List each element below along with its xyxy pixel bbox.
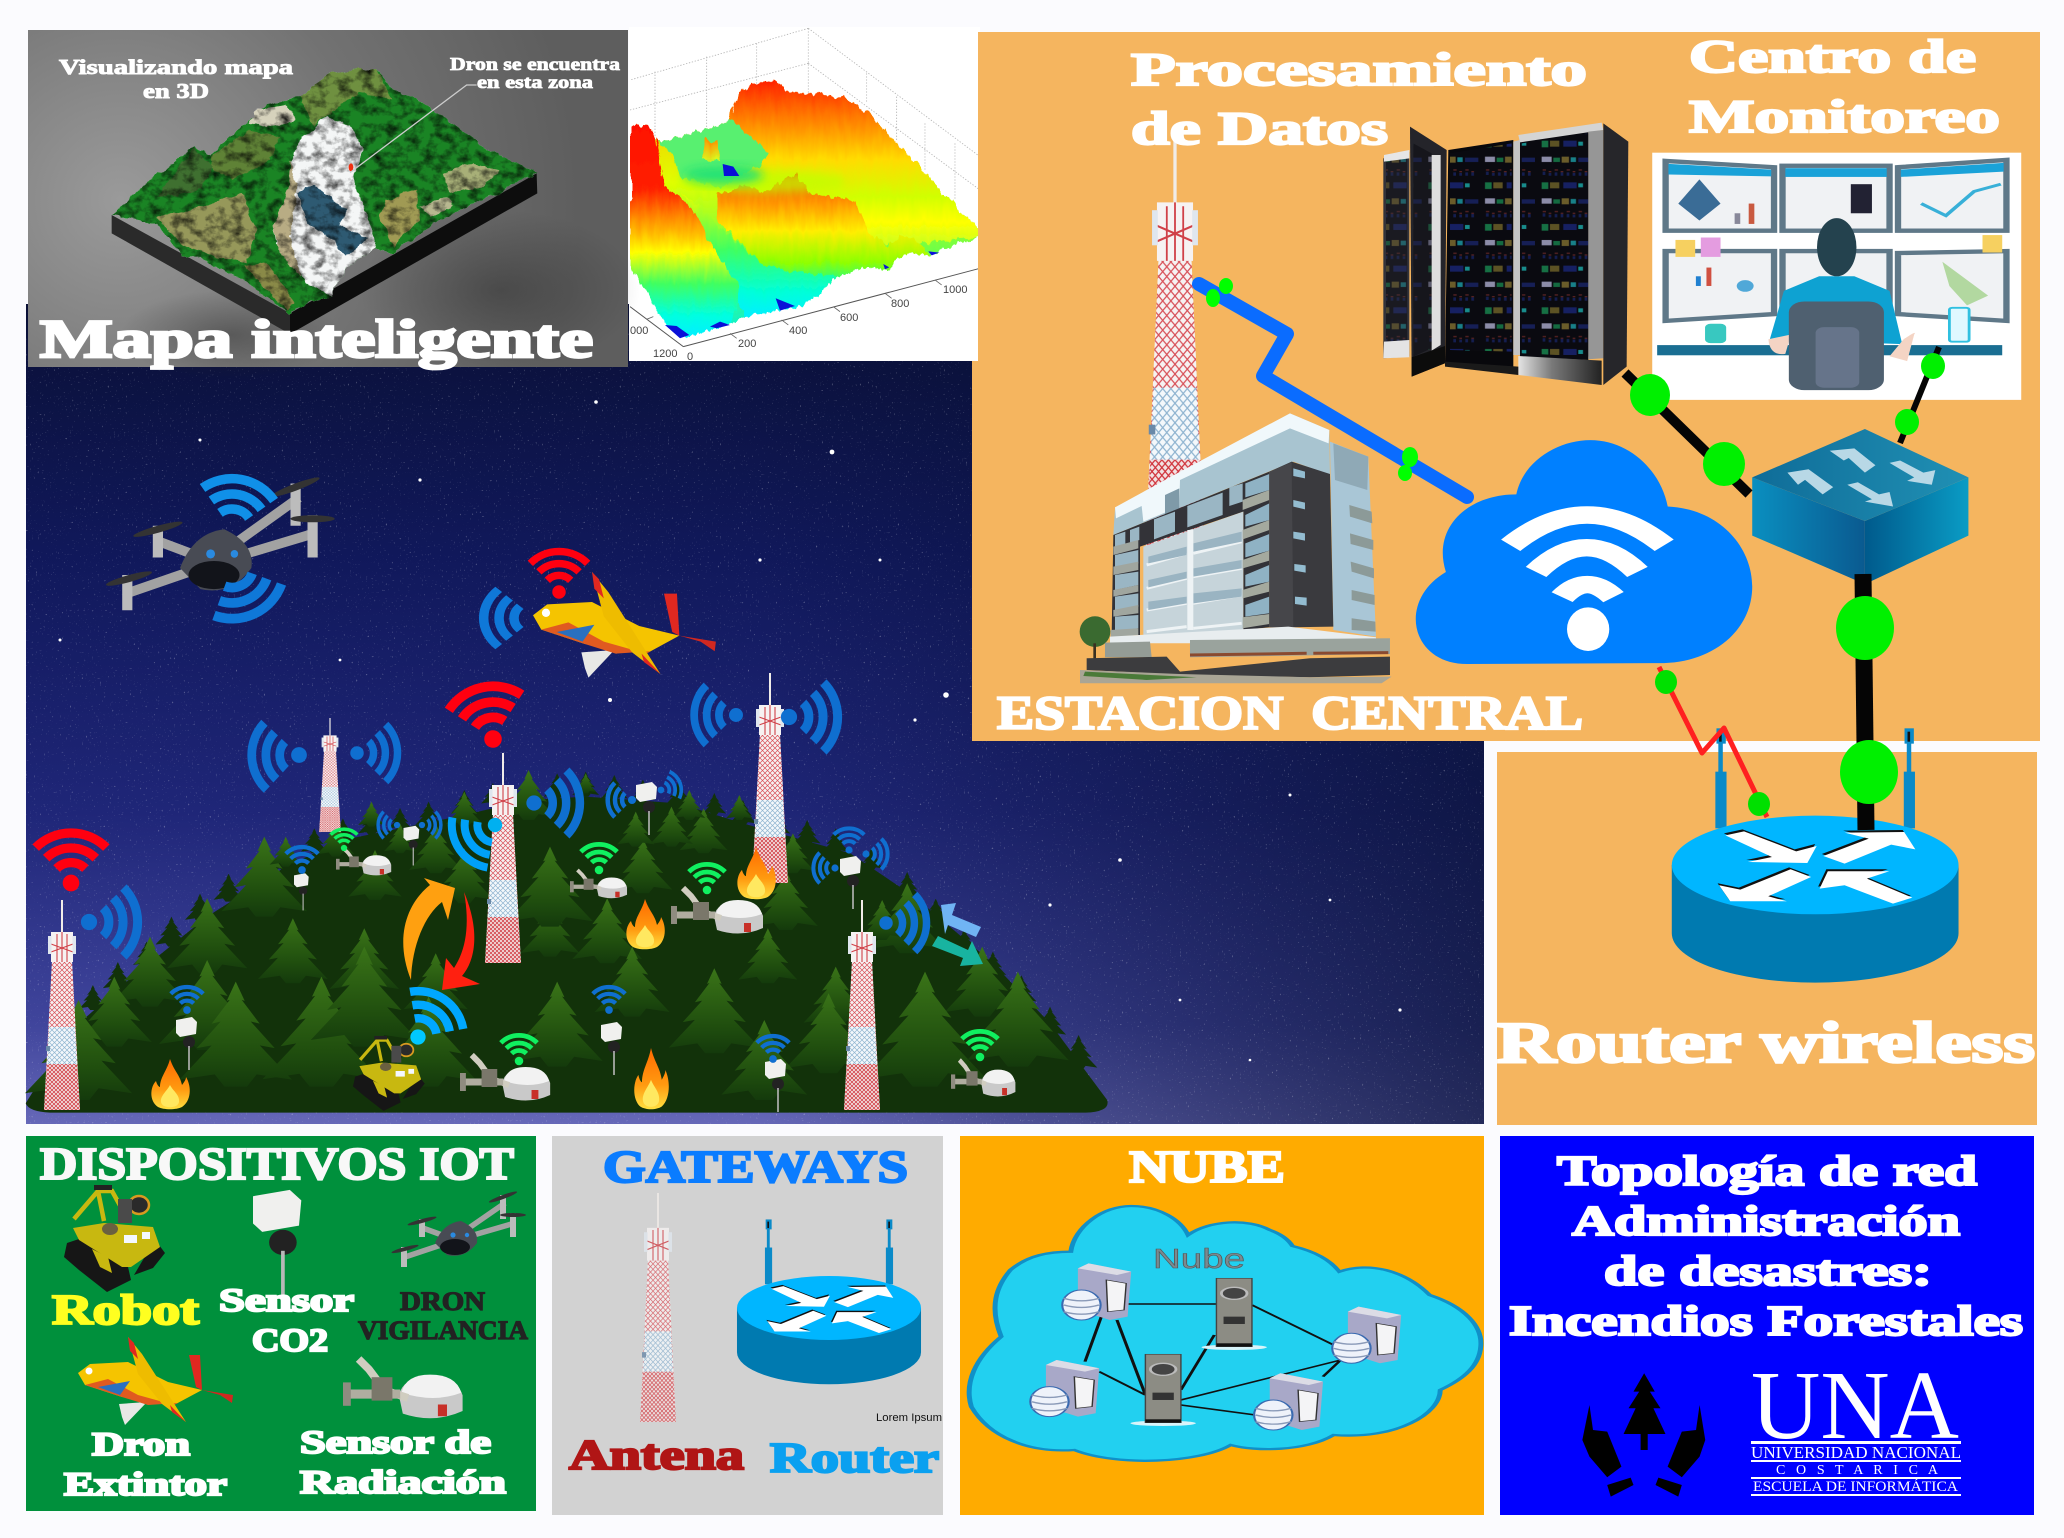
heading: Centro de Monitoreo: Monitoreo	[1689, 91, 2000, 143]
icon: extinguisher drone	[78, 1337, 233, 1425]
label: DRON VIGILANCIA: VIGILANCIA	[358, 1316, 528, 1345]
icon: surveillance drone	[391, 1190, 526, 1267]
heading: Procesamiento de Datos	[1131, 44, 1587, 155]
cloud with wifi	[1416, 440, 1752, 664]
caption: Dron se encuentra en esta zona: Dron se encuentra	[450, 54, 620, 74]
label: Dron Extintor: Dron	[92, 1427, 190, 1463]
heading: Procesamiento de Datos: Procesamiento	[1131, 44, 1587, 96]
surveillance drone in sky	[105, 475, 335, 610]
chart axis tick labels: 1200	[653, 348, 677, 360]
label: Dron Extintor	[64, 1427, 227, 1503]
label: DRON VIGILANCIA	[358, 1287, 528, 1345]
panel: 3D terrain chart	[629, 27, 980, 363]
router icon	[1672, 728, 1959, 983]
heading: Centro de Monitoreo: Centro de	[1689, 31, 1976, 83]
arrow: red curved down	[442, 892, 480, 990]
chart axis tick labels: 800	[891, 298, 909, 310]
panel: gateways	[552, 1136, 943, 1515]
caption: Visualizando mapa en 3D	[59, 55, 294, 103]
link: thick black cable switch to router	[1836, 574, 1898, 830]
building	[1080, 413, 1392, 683]
heading: Procesamiento de Datos: de Datos	[1131, 103, 1388, 155]
link: blue wireless link tower to cloud	[1199, 278, 1467, 497]
logo: UNA Universidad Nacional: ESCUELA DE INFORMÁTICA	[1753, 1478, 1958, 1495]
title: Topología de red: Topología de red	[1557, 1149, 1977, 1195]
panel: title and logos	[1500, 1136, 2034, 1515]
label: Sensor CO2: CO2	[252, 1323, 328, 1359]
terrain block	[112, 68, 537, 334]
monitoring centre	[1652, 153, 2021, 400]
link: black cable rack to switch	[1625, 373, 1749, 494]
panel: night sky with forest scene	[25, 304, 1484, 1124]
label: Router: Router	[770, 1436, 939, 1482]
panel: IoT devices	[26, 1136, 536, 1511]
label: Nube: Nube	[1153, 1243, 1245, 1274]
caption: Visualizando mapa en 3D: en 3D	[143, 79, 209, 103]
title: Administración: Administración	[1572, 1199, 1960, 1245]
icon: antenna tower	[640, 1193, 676, 1422]
logo: UNA Universidad Nacional: C O S T A R I C A	[1776, 1463, 1939, 1478]
heading: Mapa inteligente: Mapa inteligente	[40, 309, 593, 369]
wifi signals from towers	[36, 680, 927, 1062]
fires	[151, 847, 776, 1109]
network switch	[1752, 429, 1968, 584]
label: Sensor CO2: Sensor	[219, 1283, 354, 1319]
extinguisher drone in sky	[533, 572, 716, 678]
heading: NUBE: NUBE	[1129, 1141, 1285, 1192]
CO2 sensors on hill	[171, 770, 888, 1112]
chart axis tick labels: 1000	[943, 284, 967, 296]
wifi: drone signals	[195, 473, 288, 629]
network cloud diagram	[969, 1206, 1481, 1461]
label: Sensor de Radiación	[300, 1425, 506, 1501]
arrow: orange curved up	[403, 878, 455, 980]
red drone marker	[349, 163, 353, 171]
main tower	[1145, 140, 1205, 550]
robot on hill	[353, 1036, 425, 1111]
panel: 3D smart map	[28, 30, 640, 380]
panel: cloud	[960, 1136, 1484, 1515]
heading: Centro de Monitoreo	[1689, 31, 2000, 143]
logo: UNA Universidad Nacional: UNIVERSIDAD NACIONAL	[1751, 1443, 1961, 1462]
small text: Lorem Ipsum: Lorem Ipsum	[876, 1412, 942, 1424]
heading: ESTACION CENTRAL: ESTACION CENTRAL	[997, 687, 1583, 740]
radiation sensors on hill	[331, 829, 1015, 1101]
chart axis tick labels: 0	[687, 351, 693, 363]
server rack	[1383, 123, 1628, 385]
label: Dron Extintor: Extintor	[64, 1467, 227, 1503]
wifi: extinguisher signals	[484, 551, 588, 647]
logo: UNA Universidad Nacional: UNA	[1751, 1352, 1959, 1460]
caption: Visualizando mapa en 3D: Visualizando mapa	[59, 55, 294, 79]
arrow: light blue	[941, 903, 981, 937]
chart axis tick labels: 400	[789, 325, 807, 337]
chart axis tick labels	[630, 284, 967, 363]
caption: Dron se encuentra en esta zona: en esta zona	[477, 72, 593, 92]
heading: DISPOSITIVOS IOT: DISPOSITIVOS IOT	[40, 1138, 514, 1189]
title: Incendios Forestales: Incendios Forestales	[1509, 1299, 2023, 1345]
label: Antena: Antena	[569, 1433, 744, 1479]
label: Sensor de Radiación: Radiación	[300, 1465, 506, 1501]
panel: central station	[972, 31, 2040, 741]
icon: hands holding tree	[1582, 1373, 1705, 1497]
label: Sensor CO2	[219, 1283, 354, 1359]
caption: Dron se encuentra en esta zona	[450, 54, 620, 92]
icon: robot	[64, 1185, 165, 1292]
heading: Router wireless: Router wireless	[1497, 1010, 2035, 1075]
antenna towers on hill	[44, 673, 880, 1110]
link: black cable monitoring to switch	[1895, 347, 1945, 443]
title: de desastres:: de desastres:	[1604, 1249, 1932, 1295]
arrow: teal	[932, 936, 983, 966]
label: Robot: Robot	[52, 1288, 199, 1334]
icon: CO2 sensor	[253, 1190, 301, 1301]
chart axis tick labels: 200	[738, 338, 756, 350]
icon: router	[737, 1219, 921, 1384]
label: Sensor de Radiación: Sensor de	[300, 1425, 491, 1461]
heading: GATEWAYS: GATEWAYS	[603, 1141, 908, 1192]
link: red cable cloud to router	[1655, 667, 1770, 817]
label: DRON VIGILANCIA: DRON	[400, 1287, 485, 1316]
forest hill	[25, 770, 1108, 1113]
chart axis tick labels: 600	[840, 312, 858, 324]
chart axis tick labels: 000	[630, 325, 648, 337]
panel: wireless router	[1497, 728, 2037, 1125]
icon: radiation sensor	[343, 1359, 463, 1418]
